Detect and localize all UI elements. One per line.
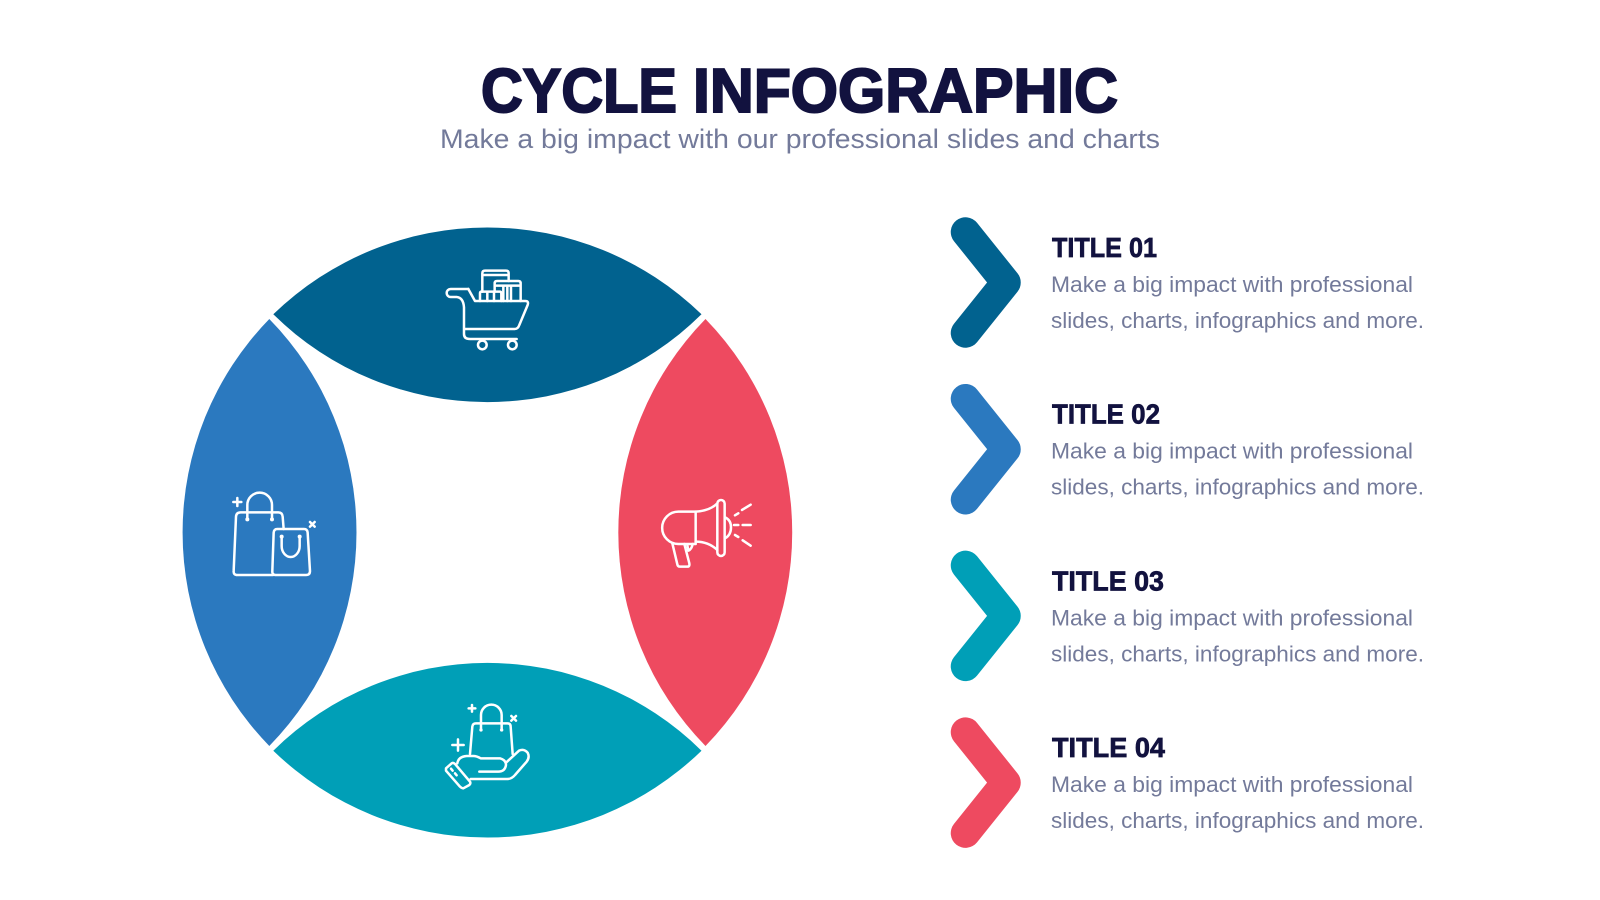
item 03 <box>966 565 1424 666</box>
title: INFOGRAPHIC <box>693 57 1118 126</box>
chevron 04 <box>966 732 1006 833</box>
subtitle: Make a big impact with our professional slides and charts <box>440 124 1160 154</box>
body 02: Make a big impact with professional <box>1051 439 1413 464</box>
icon: megaphone <box>662 500 751 567</box>
segment: bottom <box>273 663 702 838</box>
title: CYCLE <box>481 57 677 126</box>
body 04: slides, charts, infographics and more. <box>1051 808 1424 833</box>
body 03 <box>1051 605 1424 666</box>
body 03: slides, charts, infographics and more. <box>1051 641 1424 666</box>
segment: right <box>618 319 792 746</box>
heading 04: TITLE 04 <box>1052 732 1165 763</box>
chevron 02 <box>966 399 1006 500</box>
icon: shopping bags <box>233 493 315 575</box>
icon: hand holding bag <box>446 705 529 788</box>
cycle diagram <box>183 227 792 838</box>
chevron 03 <box>966 565 1006 666</box>
body 02 <box>1051 439 1424 500</box>
heading 01: TITLE 01 <box>1052 232 1157 263</box>
body 04 <box>1051 772 1424 833</box>
item 04 <box>966 732 1424 833</box>
item 01 <box>966 232 1424 333</box>
chevron 01 <box>966 232 1006 333</box>
item 02 <box>966 399 1424 500</box>
heading 02: TITLE 02 <box>1052 399 1160 430</box>
segment: left <box>183 319 356 746</box>
body 02: slides, charts, infographics and more. <box>1051 475 1424 500</box>
body 01: slides, charts, infographics and more. <box>1051 308 1424 333</box>
body 03: Make a big impact with professional <box>1051 605 1413 630</box>
icon: shopping cart <box>447 271 528 349</box>
body 04: Make a big impact with professional <box>1051 772 1413 797</box>
body 01: Make a big impact with professional <box>1051 272 1413 297</box>
heading 03: TITLE 03 <box>1052 565 1164 596</box>
segment: top <box>273 227 702 402</box>
title <box>481 57 1118 126</box>
body 01 <box>1051 272 1424 333</box>
